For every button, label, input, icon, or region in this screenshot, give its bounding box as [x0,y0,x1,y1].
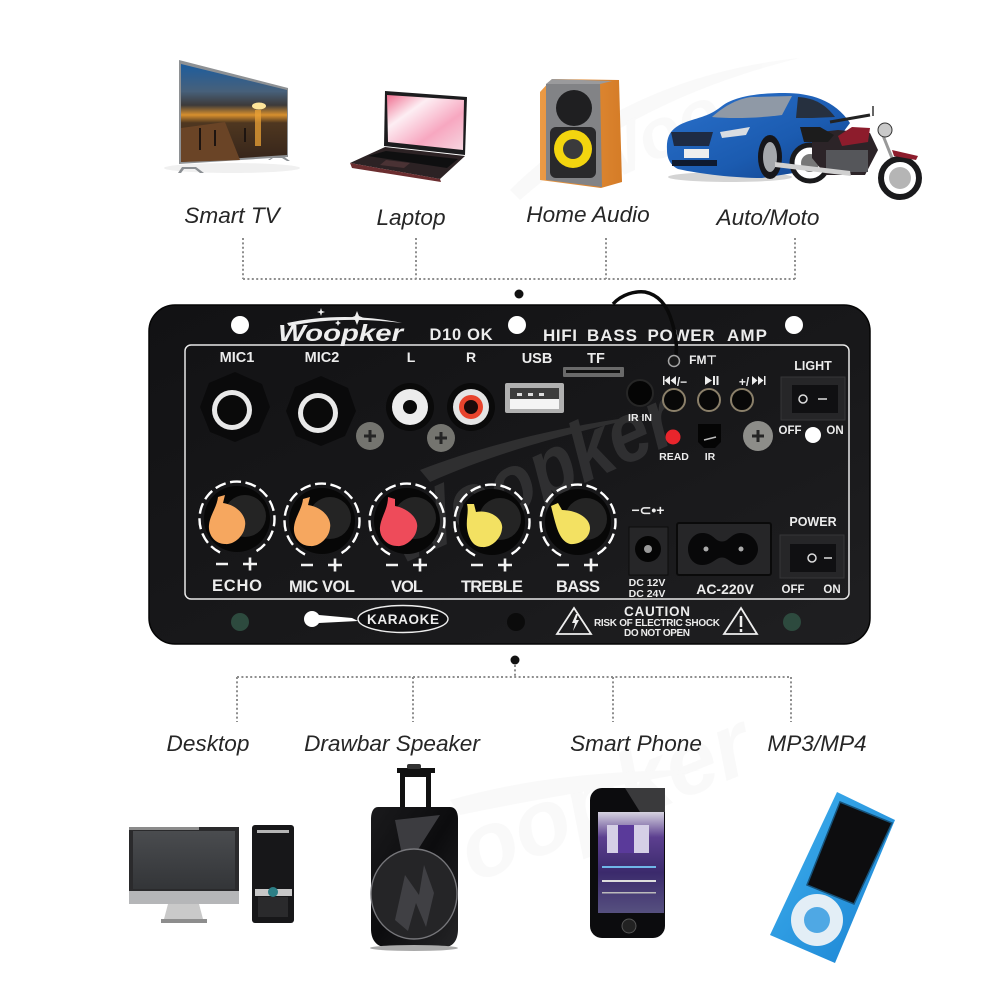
jack: RCA R: R [466,349,476,365]
connector: top dotted lines [243,238,795,298]
port: DC jack: −⊂•+ [632,502,664,518]
port: AC socket [677,523,771,597]
jack: MIC2: MIC2 [305,350,339,366]
label: Home Audio: Home Audio [526,202,650,227]
caution notice: CAUTION [624,604,690,619]
buttons: /− [677,375,687,389]
icon: home audio speaker [540,79,622,188]
label: Smart Phone: Smart Phone [570,731,702,756]
port: USB [505,351,564,413]
sensor: IR [698,424,721,463]
heading: POWER [648,326,714,345]
icon: smart TV [164,60,300,173]
caution notice [557,604,757,639]
port: DC jack: DC 12V [629,577,665,589]
knob: MIC VOL: MIC VOL [289,578,355,596]
switch: LIGHT: LIGHT [794,359,832,373]
heading: AMP [727,326,767,345]
caution notice: DO NOT OPEN [624,628,690,639]
connector: bottom dotted lines [237,656,791,722]
screws [356,421,773,452]
buttons: +/ [739,375,750,389]
jack: RCA L: L [407,349,416,365]
knob: BASS: BASS [556,578,600,596]
LED: READ: READ [659,451,689,463]
switch: LIGHT: ON [826,425,844,437]
jack: MIC1: MIC1 [220,350,254,366]
model: D10 OK [430,326,493,344]
jack: RCA L [386,349,434,431]
label: Auto/Moto: Auto/Moto [714,205,820,230]
switch: POWER: ON [823,584,841,596]
mounting holes [231,316,803,631]
switch: LIGHT [778,359,845,443]
panel plate [149,305,870,644]
icon: smart phone [590,788,665,938]
switch: LIGHT: OFF [778,425,802,437]
heading: BASS [587,326,637,345]
port: IR IN [627,380,653,424]
LED: READ [659,430,689,463]
label: Drawbar Speaker: Drawbar Speaker [304,731,481,756]
jack: MIC2 [286,350,356,446]
label: MP3/MP4: MP3/MP4 [767,731,867,756]
label: Laptop: Laptop [376,205,446,230]
port: TF: TF [587,351,605,367]
buttons [663,375,766,411]
knob: TREBLE: TREBLE [461,578,523,596]
watermark: top: Woo [564,71,733,204]
knob: ECHO [200,482,274,595]
icon: drawbar speaker [370,764,458,951]
caution notice: RISK OF ELECTRIC SHOCK [594,618,721,629]
label: Desktop: Desktop [167,731,249,756]
brand logo [278,308,404,346]
port: DC jack: DC 24V [629,588,665,600]
switch: POWER: POWER [789,515,837,529]
watermark: top [510,58,800,204]
brand logo: Woopker [278,320,404,346]
port: AC socket: AC-220V [696,581,754,597]
icon: desktop computer [129,825,294,923]
icon: laptop [350,91,467,182]
label: Smart TV: Smart TV [184,203,282,228]
switch: POWER: OFF [782,584,804,596]
knob: TREBLE [454,485,530,596]
knob: MIC VOL [284,484,360,596]
port: TF [563,351,624,377]
port: IR IN: IR IN [628,412,652,424]
icon: car and motorcycle [667,93,919,197]
port: DC jack [629,502,668,600]
watermark: bottom: Woopker [364,691,770,934]
heading [543,326,767,345]
microphone karaoke badge [304,606,448,632]
sensor: IR: IR [705,451,716,463]
microphone karaoke badge: KARAOKE [367,612,439,627]
label: FM [668,353,717,367]
knob: ECHO: ECHO [212,577,262,595]
panel: amplifier board [149,292,870,644]
label: FM: FM⊤ [689,353,717,367]
switch: POWER [780,515,844,596]
jack: RCA R [447,349,495,431]
icon: MP3 player [770,792,895,963]
knob: BASS [540,485,616,596]
jack: MIC1 [200,350,270,442]
inner white frame [185,345,849,599]
knob: VOL [370,484,444,596]
antenna wire [613,292,676,360]
watermark on panel: Woopker [369,368,694,581]
heading: HIFI [543,326,577,345]
port: USB: USB [522,351,552,367]
knob: VOL: VOL [391,578,423,596]
